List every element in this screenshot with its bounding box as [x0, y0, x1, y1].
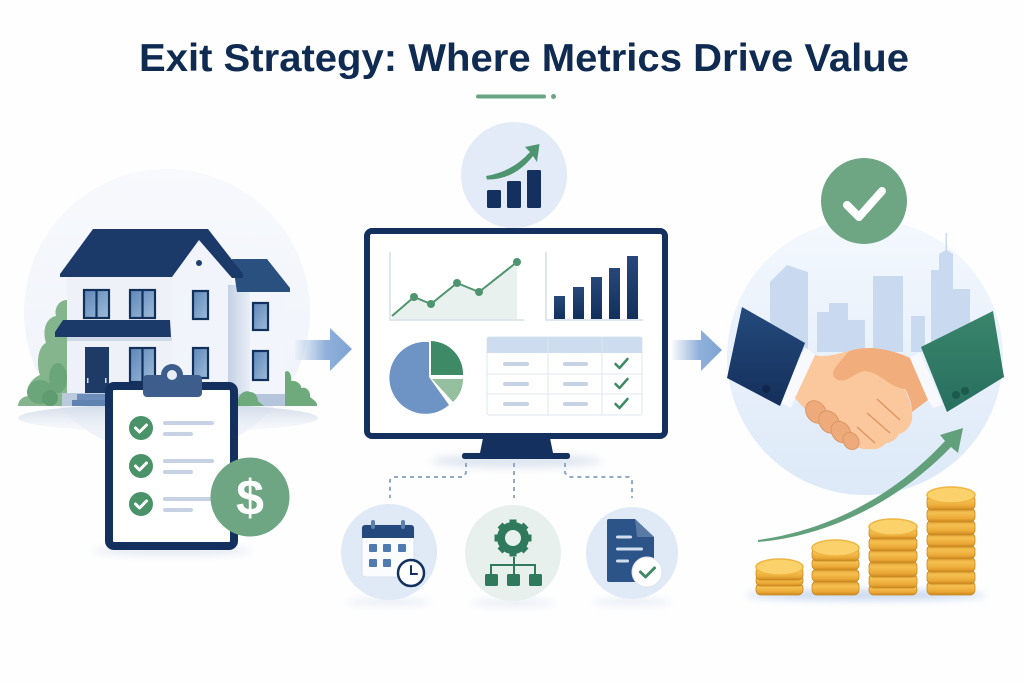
- panel: deal handshake: [727, 158, 1004, 600]
- front door: [85, 347, 109, 394]
- bar chart: [546, 252, 643, 320]
- left cuff: [780, 347, 815, 408]
- monitor base: [462, 453, 570, 459]
- background circle: [24, 169, 310, 455]
- foundation: [238, 394, 285, 406]
- right cuff: [910, 352, 943, 408]
- monitor screen: [367, 231, 665, 436]
- clipboard: [109, 364, 234, 546]
- right bush: [285, 371, 317, 406]
- calendar icon: [341, 504, 437, 605]
- coin stack 3: [869, 519, 917, 595]
- side wing wall: [236, 290, 285, 394]
- side roof: [232, 259, 290, 292]
- coin stack 4: [927, 487, 975, 595]
- dashed connectors: [390, 463, 632, 498]
- check row 3: [129, 492, 214, 516]
- left sleeve: [727, 307, 805, 406]
- value growth arrow: [758, 428, 963, 542]
- arrow: house to dashboard: [295, 328, 352, 371]
- growth icon: [461, 122, 567, 228]
- left bush: [18, 300, 68, 406]
- main wall: [67, 277, 173, 394]
- main roof: [60, 229, 243, 278]
- porch steps: [62, 393, 110, 406]
- clipboard shadow: [92, 547, 252, 555]
- background circle: [727, 219, 1003, 495]
- ground shadow: [18, 404, 318, 432]
- dollar badge: [210, 458, 290, 536]
- coin stack 2: [812, 540, 859, 595]
- board: [109, 386, 234, 546]
- check row 1: [129, 416, 214, 440]
- small shrub: [238, 391, 264, 406]
- attic vent: [196, 260, 202, 266]
- coin shadow: [746, 590, 986, 600]
- approval badge: [821, 158, 907, 244]
- monitor shadow: [431, 454, 601, 468]
- arrow: dashboard to deal: [672, 330, 722, 371]
- title accent underline: [476, 94, 556, 99]
- process gear icon: [465, 505, 561, 606]
- document icon: [586, 507, 678, 605]
- pie chart: [389, 341, 463, 414]
- hands: [795, 348, 928, 453]
- panel: house and checklist: [18, 169, 318, 555]
- monitor stand: [480, 438, 553, 453]
- panel: dashboard: [341, 122, 678, 606]
- balcony awning: [55, 320, 171, 337]
- windows: [84, 290, 268, 382]
- porch wall shade: [67, 337, 172, 341]
- clip: [143, 364, 202, 397]
- data table: [487, 337, 642, 415]
- title: Exit Strategy: Where Metrics Drive Value: [139, 37, 909, 80]
- line chart: [390, 252, 524, 320]
- city skyline: [770, 233, 970, 352]
- coin stack 1: [756, 559, 803, 595]
- gable wall: [172, 240, 232, 394]
- dollar badge: $: [236, 470, 264, 526]
- right sleeve: [921, 311, 1004, 412]
- check row 2: [129, 454, 214, 478]
